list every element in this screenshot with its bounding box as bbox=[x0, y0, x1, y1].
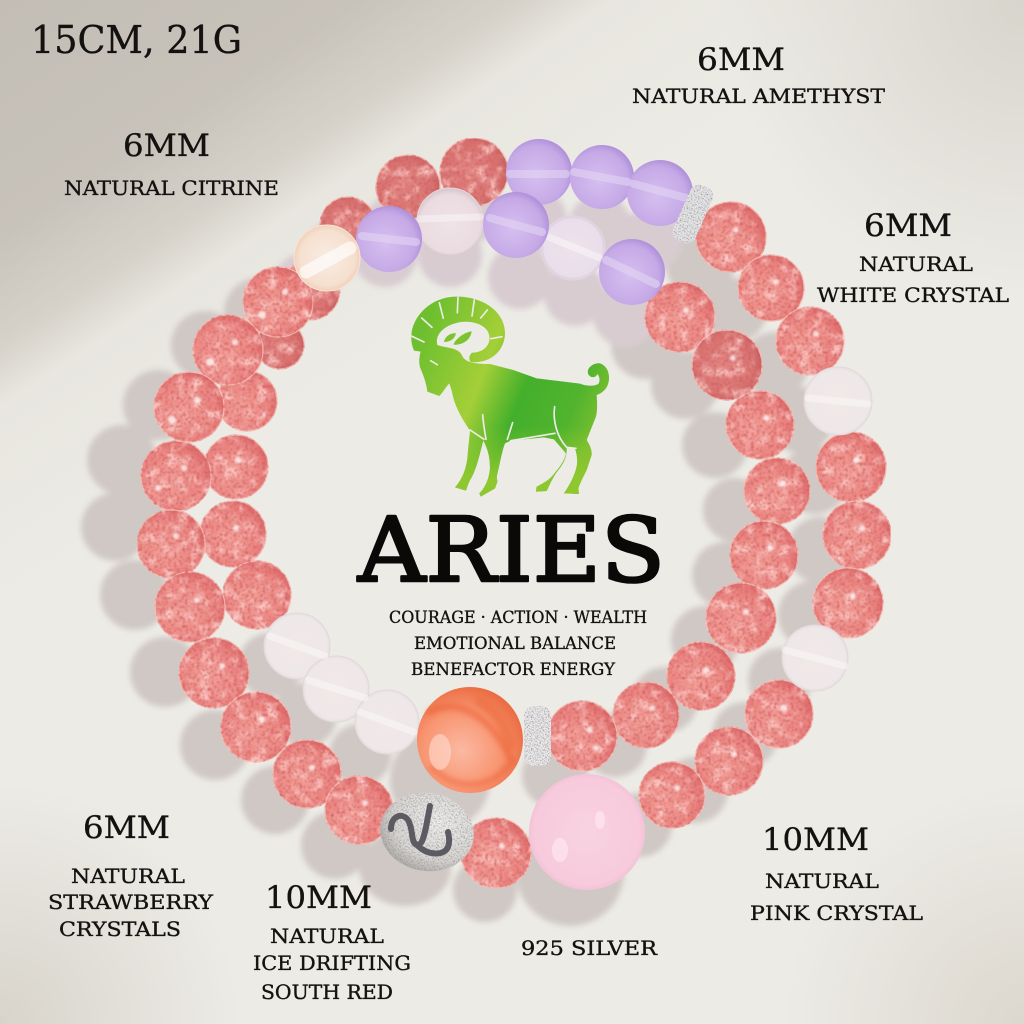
benefits text: EMOTIONAL BALANCE bbox=[414, 634, 616, 653]
bead sparkles bbox=[155, 227, 865, 849]
label: strawberry crystals: CRYSTALS bbox=[59, 918, 181, 941]
silver spacers bbox=[524, 182, 716, 766]
label: white crystal: NATURAL bbox=[859, 253, 973, 276]
label: pink crystal bbox=[750, 822, 923, 925]
benefits text: COURAGE · ACTION · WEALTH bbox=[389, 608, 647, 627]
icon: green ram bbox=[411, 297, 609, 498]
925 silver aries bead bbox=[374, 785, 480, 879]
size and weight: 15CM, 21G bbox=[31, 18, 242, 62]
ice drifting south red bead bbox=[417, 687, 523, 793]
benefits text bbox=[389, 608, 647, 679]
label: strawberry crystals: STRAWBERRY bbox=[48, 891, 214, 914]
label: pink crystal: NATURAL bbox=[765, 870, 879, 893]
citrine bead bbox=[294, 225, 360, 291]
label: white crystal: 6MM bbox=[864, 208, 952, 244]
pink crystal bead bbox=[529, 774, 645, 890]
label: amethyst: 6MM bbox=[697, 42, 785, 78]
label: pink crystal: 10MM bbox=[762, 822, 869, 858]
label: citrine bbox=[64, 128, 279, 200]
label: pink crystal: PINK CRYSTAL bbox=[750, 902, 923, 925]
benefits text: BENEFACTOR ENERGY bbox=[411, 660, 616, 679]
bracelet: white crystal beads bbox=[264, 188, 872, 754]
bead shadows bbox=[81, 177, 853, 926]
label: citrine: NATURAL CITRINE bbox=[64, 177, 279, 200]
label: amethyst bbox=[632, 42, 885, 108]
label: ice drifting south red: ICE DRIFTING bbox=[253, 952, 411, 975]
title: ARIES bbox=[357, 498, 665, 602]
label: ice drifting south red bbox=[253, 880, 411, 1004]
label: citrine: 6MM bbox=[123, 128, 210, 164]
label: white crystal bbox=[817, 208, 1009, 307]
label: ice drifting south red: 10MM bbox=[265, 880, 372, 916]
label: ice drifting south red: SOUTH RED bbox=[261, 981, 393, 1004]
label: amethyst: NATURAL AMETHYST bbox=[632, 85, 885, 108]
label: white crystal: WHITE CRYSTAL bbox=[817, 284, 1009, 307]
label: strawberry crystals bbox=[48, 810, 214, 941]
label: strawberry crystals: 6MM bbox=[83, 810, 170, 846]
bracelet: strawberry crystal beads bbox=[137, 138, 891, 888]
label: strawberry crystals: NATURAL bbox=[71, 865, 185, 888]
label: ice drifting south red: NATURAL bbox=[270, 925, 384, 948]
bracelet: amethyst beads bbox=[356, 139, 693, 305]
label: 925 silver: 925 SILVER bbox=[521, 937, 659, 960]
